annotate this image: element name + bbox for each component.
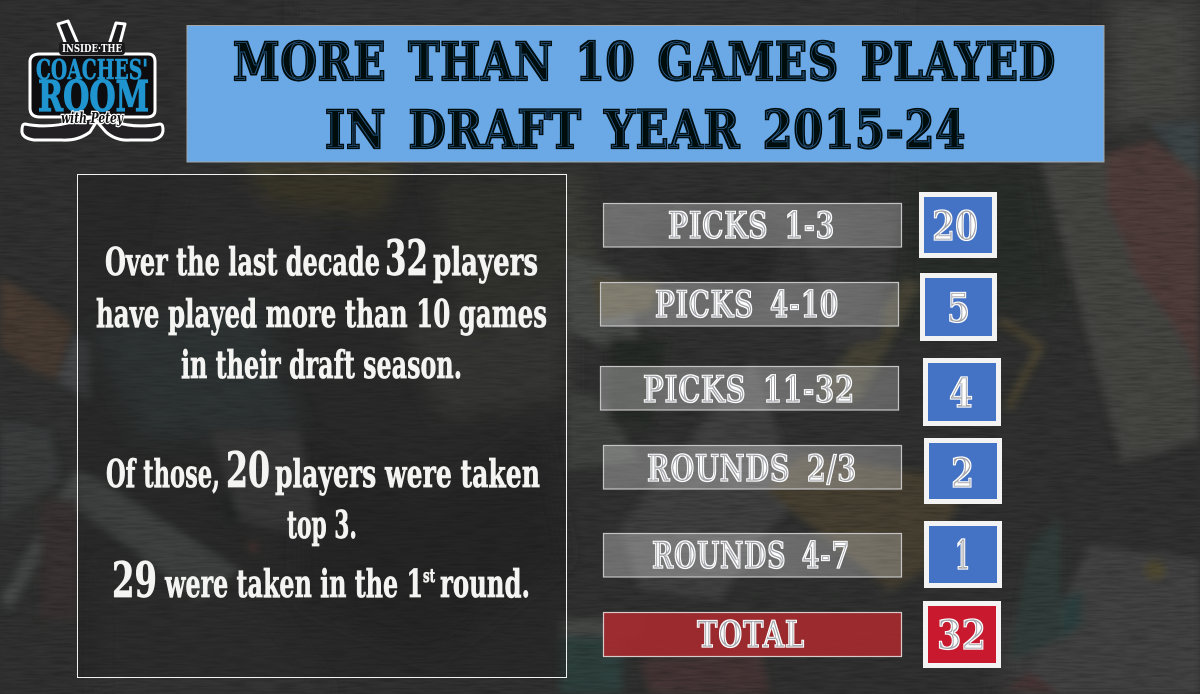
row: total <box>604 604 998 666</box>
bottom rows <box>560 627 622 694</box>
right slab <box>1040 150 1200 463</box>
panel: summary text <box>78 174 566 678</box>
row: picks 1-3: PICKS 1-3 <box>668 205 835 247</box>
value box: 20 <box>922 194 994 256</box>
text block: first paragraph: Over the last decade <box>105 239 380 284</box>
diagonal light block <box>620 360 800 600</box>
text block: first paragraph: in their draft season. <box>181 342 462 387</box>
value box: 4: 4 <box>949 370 973 417</box>
row: rounds 2/3 <box>604 440 1000 502</box>
value box: 1: 1 <box>955 532 970 579</box>
value box: 32: 32 <box>937 612 986 659</box>
text block: second paragraph: Of those, <box>106 451 220 496</box>
row: rounds 2/3: ROUNDS 2/3 <box>647 448 857 490</box>
text block: second paragraph: were taken in the 1 <box>164 561 423 606</box>
left strip <box>0 277 73 380</box>
title text: IN DRAFT YEAR 2015-24 <box>325 100 966 161</box>
logo text: INSIDE·THE <box>62 42 122 55</box>
row: picks 11-32: PICKS 11-32 <box>643 369 855 411</box>
logo text: with Petey <box>61 109 124 127</box>
icon: crossed hockey sticks <box>22 21 163 140</box>
value box: 2 <box>926 440 1000 502</box>
yellow outline <box>1000 320 1040 408</box>
logo: Inside the Coaches' Room with Petey <box>22 21 163 140</box>
row: rounds 4-7 <box>604 524 1000 586</box>
value box: 2: 2 <box>951 450 974 497</box>
value box: 4 <box>926 360 998 424</box>
text block: second paragraph: top 3. <box>287 502 357 547</box>
text block: second paragraph: st <box>423 565 435 587</box>
row: rounds 4-7: ROUNDS 4-7 <box>652 535 850 577</box>
logo text <box>36 42 149 127</box>
logo backing <box>30 54 155 117</box>
bottom right <box>1020 545 1200 694</box>
row: picks 4-10: PICKS 4-10 <box>655 284 839 326</box>
text block: first paragraph: have played more than 10 games <box>96 291 547 336</box>
text block: first paragraph: players <box>433 239 538 284</box>
text block: first paragraph: 32 <box>385 229 428 287</box>
value box: 1 <box>926 524 1000 586</box>
text block: second paragraph: players were taken <box>275 451 540 496</box>
panel interior <box>78 470 240 600</box>
value box: 32 <box>926 604 998 666</box>
logo text: COACHES' <box>36 55 148 86</box>
tan card <box>767 455 970 590</box>
value box: 5 <box>922 276 994 338</box>
text block: second paragraph: 29 <box>112 551 157 609</box>
row: picks 11-32 <box>600 360 998 424</box>
logo text: ROOM <box>38 72 149 121</box>
row: total: TOTAL <box>697 614 805 656</box>
value box: 5: 5 <box>947 285 970 332</box>
value box: 20: 20 <box>932 203 978 250</box>
title banner <box>187 26 1104 162</box>
left of rows <box>567 253 640 345</box>
row: picks 1-3 <box>604 194 994 256</box>
row: picks 4-10 <box>600 276 994 338</box>
text block: second paragraph: round. <box>440 561 530 606</box>
text block: second paragraph: 20 <box>226 441 270 499</box>
